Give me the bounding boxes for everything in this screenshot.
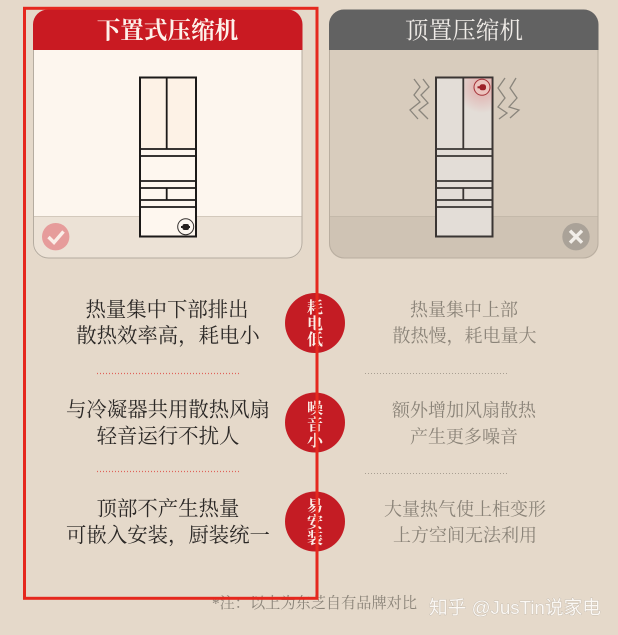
icon: fridge with compressor at bottom [140, 78, 196, 236]
text: left row 2: 轻音运行不扰人 [97, 425, 239, 448]
badge: easy install [285, 492, 345, 552]
highlight rectangle [24, 8, 317, 598]
icon: check mark [42, 223, 69, 250]
text: left row 1 [76, 298, 260, 348]
text: left row 3: 可嵌入安装，厨装统一 [66, 524, 270, 547]
text: right row 3 [384, 500, 546, 546]
panel: bottom-mounted compressor [33, 9, 303, 259]
badge: low noise: 音 [307, 416, 323, 434]
text: left row 2 [66, 398, 270, 448]
badge: low power: 低 [307, 331, 323, 349]
footnote: *注：以上为东芝自有品牌对比 [212, 594, 417, 612]
badge: low noise [285, 392, 345, 452]
badge: low noise: 噪 [307, 400, 323, 418]
text: right row 1 [392, 300, 536, 346]
icon: compressor [178, 219, 194, 235]
badge: low power: 电 [307, 315, 323, 333]
text: right row 2: 额外增加风扇散热 [392, 400, 537, 420]
text: right row 1: 散热慢，耗电量大 [392, 326, 536, 346]
text: right row 2: 产生更多噪音 [410, 427, 518, 447]
heading: bottom-mounted compressor: 下置式压缩机 [97, 18, 239, 44]
text: right row 2 [392, 400, 537, 447]
badge: easy install: 装 [307, 528, 323, 548]
text: left row 2: 与冷凝器共用散热风扇 [66, 398, 270, 422]
text: left row 1: 热量集中下部排出 [85, 298, 249, 322]
text: right row 3: 大量热气使上柜变形 [384, 500, 546, 520]
icon: fridge with compressor at top [435, 76, 494, 238]
icon: hot compressor [474, 79, 490, 95]
heading: top-mounted compressor: 顶置压缩机 [405, 18, 523, 44]
text: left row 3: 顶部不产生热量 [97, 498, 239, 520]
text: right row 3: 上方空间无法利用 [393, 526, 537, 546]
watermark: 知乎 @JusTin说家电 [429, 597, 601, 618]
badge: easy install: 安 [307, 514, 324, 532]
icon: vibration lines left [410, 79, 429, 119]
text: left row 1: 散热效率高，耗电小 [76, 324, 260, 348]
text: right row 1: 热量集中上部 [410, 300, 518, 320]
text: left row 3 [66, 498, 270, 547]
badge: low noise: 小 [307, 432, 325, 450]
badge: low power [285, 293, 345, 353]
panel: top-mounted compressor [329, 9, 599, 259]
icon: vibration lines right [498, 78, 519, 119]
icon: cross mark [562, 223, 590, 250]
badge: easy install: 易 [307, 498, 323, 516]
badge: low power: 耗 [307, 299, 323, 317]
